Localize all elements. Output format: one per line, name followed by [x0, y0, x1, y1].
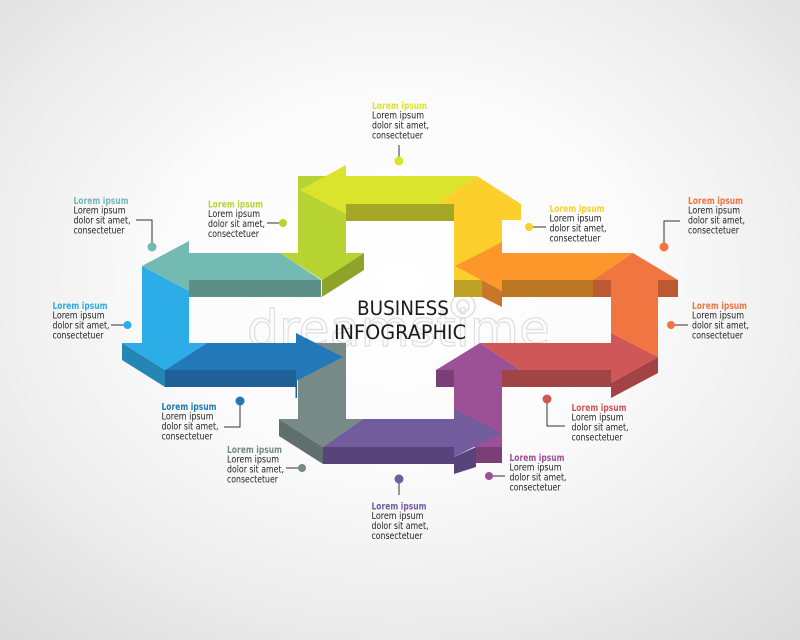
callout: dark blue: [162, 396, 244, 442]
callout: grey: Lorem ipsum: [227, 445, 282, 456]
arrow: purple: [323, 409, 502, 474]
arrow: green: [280, 176, 364, 297]
arrow: amber: [455, 242, 633, 307]
callout: magenta: Lorem ipsum: [510, 462, 562, 474]
callout: purple: Lorem ipsum: [372, 502, 427, 512]
callout: top lime: dolor sit amet,: [372, 120, 429, 132]
arrow: teal: [142, 241, 321, 297]
callout: purple: consectetuer: [372, 531, 423, 542]
callout: yellow: Lorem ipsum: [550, 214, 602, 224]
callout: magenta: [485, 453, 566, 494]
callout: dark blue: dolor sit amet,: [162, 422, 218, 432]
callout: dark blue: Lorem ipsum: [162, 402, 217, 413]
title: BUSINESS: [357, 297, 449, 320]
callout: yellow: dolor sit amet,: [550, 224, 606, 234]
callout: magenta: dolor sit amet,: [510, 472, 566, 484]
callout: yellow: [525, 204, 606, 244]
callout: grey: Lorem ipsum: [227, 454, 279, 466]
callout: green: consectetuer: [208, 229, 259, 240]
callout: purple: Lorem ipsum: [372, 511, 424, 522]
callout: yellow: Lorem ipsum: [550, 204, 605, 215]
callout: green: dolor sit amet,: [208, 219, 265, 230]
callout: green: Lorem ipsum: [208, 209, 260, 220]
callout: amber: Lorem ipsum: [688, 206, 740, 216]
callout: magenta: consectetuer: [510, 482, 561, 494]
arrow: lime: [300, 165, 477, 221]
callout: grey: consectetuer: [227, 474, 278, 486]
callout: sky blue: Lorem ipsum: [52, 310, 104, 322]
callout: grey: dolor sit amet,: [227, 464, 284, 476]
arrow: dark blue: [165, 333, 343, 398]
callout: amber: dolor sit amet,: [688, 216, 745, 226]
title: INFOGRAPHIC: [334, 321, 466, 344]
callout: dark blue: Lorem ipsum: [162, 412, 214, 422]
watermark: dreamstime: [247, 300, 550, 358]
callout: red: Lorem ipsum: [572, 412, 624, 424]
callout: teal: Lorem ipsum: [74, 196, 129, 207]
arrow: magenta: [436, 343, 520, 463]
callout: dark blue: consectetuer: [162, 432, 213, 442]
arrow: orange: [593, 253, 678, 357]
callout: top lime: Lorem ipsum: [372, 101, 427, 112]
callout: orange right: Lorem ipsum: [692, 301, 747, 312]
callout: amber: [660, 196, 745, 252]
callout: orange right: Lorem ipsum: [692, 310, 744, 322]
callout: amber: Lorem ipsum: [688, 196, 743, 207]
callout: green: [208, 200, 287, 240]
arrow: red: [480, 333, 658, 398]
arrow: sky blue: [122, 266, 207, 387]
callout: orange right: dolor sit amet,: [692, 320, 749, 332]
callout: teal: [74, 196, 156, 252]
callout: orange right: consectetuer: [692, 330, 743, 342]
callout: top lime: [372, 101, 429, 166]
callout: red: Lorem ipsum: [572, 403, 627, 414]
callout: teal: consectetuer: [74, 226, 125, 236]
callout: sky blue: dolor sit amet,: [52, 320, 110, 332]
callout: amber: consectetuer: [688, 226, 739, 236]
title: [334, 297, 466, 344]
callout: red: consectetuer: [572, 432, 623, 444]
callout: red: dolor sit amet,: [572, 422, 628, 434]
callout: top lime: consectetuer: [372, 130, 423, 142]
callout: red: [542, 394, 628, 444]
callout: green: Lorem ipsum: [208, 200, 263, 210]
callout: top lime: Lorem ipsum: [372, 110, 424, 122]
callout: grey: [227, 445, 306, 486]
arrow: yellow: [437, 176, 521, 297]
callout: purple: [372, 474, 428, 542]
callout: yellow: consectetuer: [550, 234, 601, 244]
callout: orange right: [667, 301, 749, 342]
callout: sky blue: consectetuer: [52, 330, 104, 342]
callout: sky blue: [52, 301, 132, 342]
callout: teal: Lorem ipsum: [74, 206, 126, 216]
callout: purple: dolor sit amet,: [372, 521, 428, 532]
callout: sky blue: Lorem ipsum: [52, 301, 108, 312]
callout: magenta: Lorem ipsum: [510, 453, 565, 464]
arrow: grey: [279, 343, 363, 464]
callout: teal: dolor sit amet,: [74, 216, 130, 226]
